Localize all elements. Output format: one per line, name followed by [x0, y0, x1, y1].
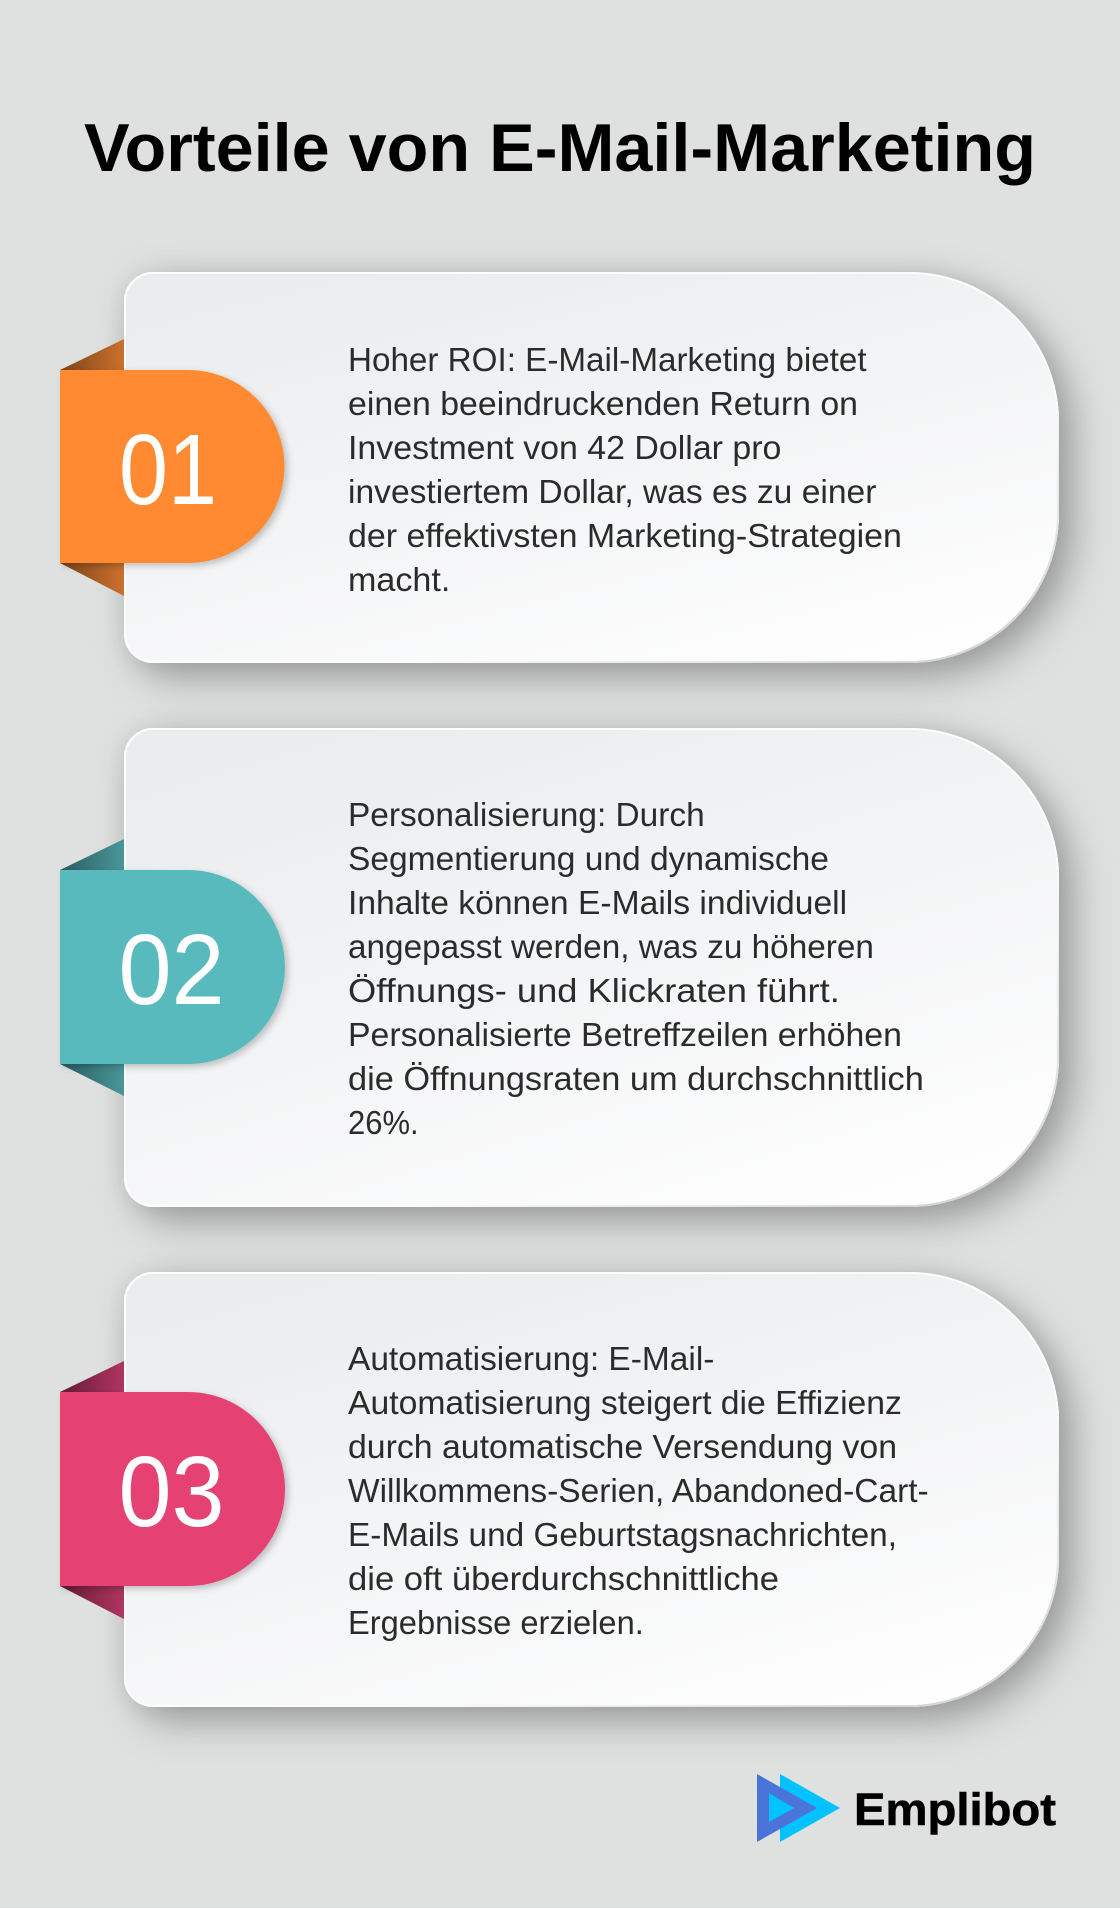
text block: Öffnungs- und Klickraten führt.	[348, 972, 840, 1009]
title: Vorteile von E-Mail-Marketing	[84, 110, 1036, 186]
icon: play triangles	[757, 1774, 840, 1842]
text block: die oft überdurchschnittliche	[348, 1560, 779, 1597]
number badge	[60, 1392, 285, 1586]
ribbon fold top	[60, 339, 124, 370]
text block: E-Mails und Geburtstagsnachrichten,	[348, 1516, 897, 1553]
ribbon fold bottom	[60, 1064, 124, 1096]
text block	[348, 796, 924, 1141]
card background	[124, 272, 1059, 663]
ribbon fold top	[60, 1361, 124, 1392]
ribbon fold bottom	[60, 1586, 124, 1619]
text block: Segmentierung und dynamische	[348, 840, 829, 877]
ribbon fold bottom	[60, 563, 124, 596]
wordmark: Emplibot	[854, 1784, 1056, 1835]
text block: Investment von 42 Dollar pro	[348, 429, 781, 466]
text block: angepasst werden, was zu höheren	[348, 928, 874, 965]
text block: macht.	[348, 561, 450, 598]
text block: 26%.	[348, 1104, 419, 1141]
text block: Ergebnisse erzielen.	[348, 1604, 644, 1641]
card background	[124, 1272, 1059, 1707]
text block: der effektivsten Marketing-Strategien	[348, 517, 902, 554]
number badge	[60, 870, 285, 1064]
number 03: 03	[118, 1436, 224, 1548]
text block: einen beeindruckenden Return on	[348, 385, 858, 422]
text block: die Öffnungsraten um durchschnittlich	[348, 1060, 924, 1097]
number badge	[60, 370, 284, 563]
card background	[124, 728, 1059, 1207]
text block: Automatisierung steigert die Effizienz	[348, 1384, 902, 1421]
logo: Emplibot	[757, 1774, 1056, 1842]
text block	[348, 1340, 929, 1641]
text block	[348, 341, 902, 598]
panel: 01 high ROI	[60, 272, 1059, 663]
panel: 03 automation	[60, 1272, 1059, 1707]
text block: durch automatische Versendung von	[348, 1428, 897, 1465]
number 02: 02	[118, 914, 224, 1026]
text block: Willkommens-Serien, Abandoned-Cart-	[348, 1472, 929, 1509]
ribbon fold top	[60, 839, 124, 870]
text block: Personalisierung: Durch	[348, 796, 705, 833]
number 01: 01	[119, 414, 217, 526]
text block: Hoher ROI: E-Mail-Marketing bietet	[348, 341, 867, 378]
text block: investiertem Dollar, was es zu einer	[348, 473, 876, 510]
text block: Inhalte können E-Mails individuell	[348, 884, 847, 921]
text block: Personalisierte Betreffzeilen erhöhen	[348, 1016, 902, 1053]
panel: 02 personalisation	[60, 728, 1059, 1207]
text block: Automatisierung: E-Mail-	[348, 1340, 714, 1377]
